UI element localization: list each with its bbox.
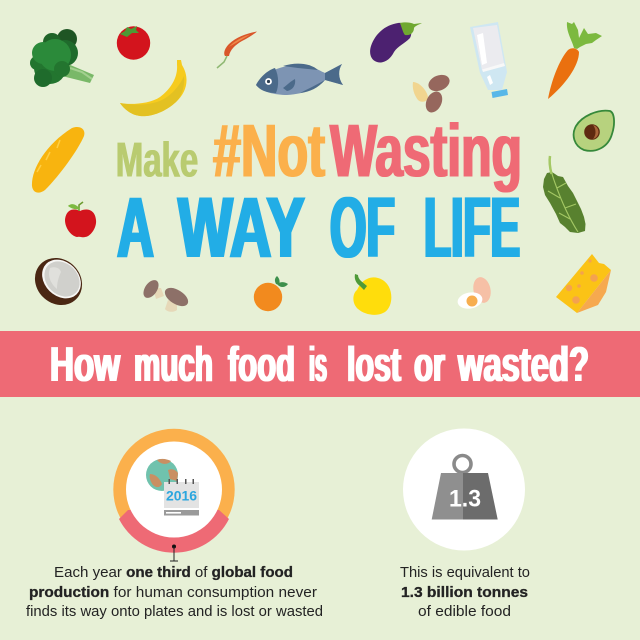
icon: tomato [117, 26, 150, 60]
title: A [117, 180, 154, 276]
icon: carrot [548, 22, 602, 99]
icon: fish [256, 64, 343, 95]
banner: how much food is lost or wasted: is [309, 338, 327, 392]
text: 1.3 billion tonnes [400, 564, 530, 620]
icon: 1.3 weight in white circle [403, 428, 525, 550]
icon: yellow pepper [353, 274, 391, 315]
text: one third of global food production: production for human consumption never [29, 584, 317, 601]
text: one third of global food production: Each year one third of global food [54, 564, 293, 581]
pointer [170, 544, 178, 561]
icon: eggs [456, 276, 493, 311]
banner: how much food is lost or wasted: lost [347, 338, 401, 392]
icon: almonds [413, 72, 452, 115]
icon: apple [65, 202, 96, 237]
title [116, 108, 522, 276]
text: 1.3 billion tonnes: This is equivalent to [400, 564, 530, 581]
banner: how much food is lost or wasted: much [134, 338, 213, 392]
title: #Not [213, 108, 325, 192]
icon: orange [254, 276, 288, 311]
icon: avocado [574, 111, 614, 151]
icon: calendar 2016: 2016 [166, 488, 197, 504]
banner: how much food is lost or wasted: or [414, 338, 445, 392]
icon: chili pepper [217, 32, 257, 68]
text: one third of global food production: finds its way onto plates and is lost or wasted [26, 603, 323, 620]
icon: banana [120, 60, 187, 116]
icon: cheese [556, 254, 611, 313]
banner: how much food is lost or wasted: How [50, 338, 121, 392]
icon: globe [146, 459, 178, 491]
chart: one third donut with globe and calendar [113, 429, 235, 561]
title: Make [116, 134, 198, 188]
title: Wasting [330, 108, 522, 192]
title: OF [330, 180, 395, 276]
icon: baguette [32, 127, 84, 193]
icon: coconut [25, 248, 92, 315]
text: 1.3 billion tonnes: 1.3 billion tonnes [401, 584, 528, 601]
text: 1.3 billion tonnes: of edible food [418, 603, 511, 620]
icon: broccoli [30, 29, 94, 87]
banner: how much food is lost or wasted [0, 331, 640, 397]
title: LIFE [424, 180, 520, 276]
icon: milk bottle [470, 22, 508, 98]
icon: eggplant [370, 22, 422, 63]
icon: mushrooms [140, 277, 191, 312]
icon: kale leaf [543, 156, 586, 233]
text: one third of global food production [26, 564, 323, 620]
title: WAY [178, 180, 305, 276]
icon: 1.3 weight in white circle: 1.3 [449, 486, 481, 512]
banner: how much food is lost or wasted: food [228, 338, 295, 392]
